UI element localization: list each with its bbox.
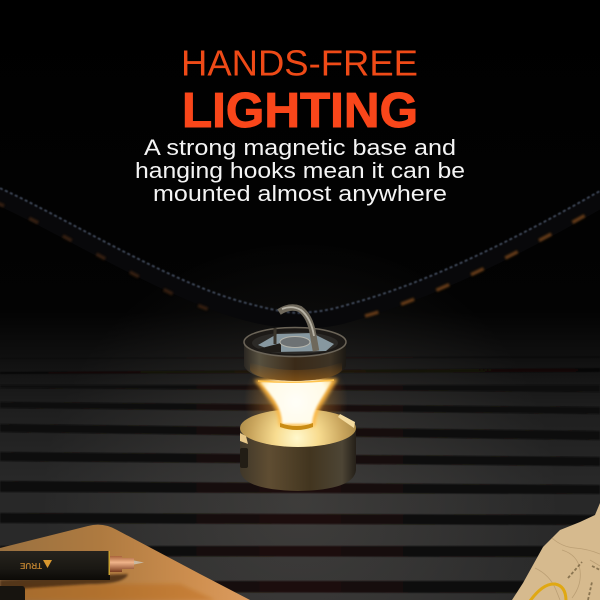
description xyxy=(135,135,465,206)
cap top rim xyxy=(244,328,346,356)
cord left reflection xyxy=(0,202,220,313)
striped surface xyxy=(0,356,600,593)
pen copper tip xyxy=(110,556,134,572)
cord top highlight xyxy=(0,186,600,313)
cap underglow xyxy=(250,362,342,381)
lamp glow xyxy=(244,348,348,452)
bulb rim highlight xyxy=(258,380,334,382)
description: mounted almost anywhere xyxy=(153,181,447,206)
dark clip object xyxy=(0,586,25,600)
surface light xyxy=(0,240,600,600)
base body xyxy=(240,428,356,491)
title: hands-free: HANDS-FREE xyxy=(181,42,418,84)
cap plate xyxy=(258,333,334,352)
title: lighting: LIGHTING xyxy=(182,83,418,138)
description: A strong magnetic base and xyxy=(144,135,456,160)
cord right reflection xyxy=(365,204,600,316)
notebook xyxy=(0,525,250,600)
map paper xyxy=(512,503,600,600)
notebook warm reflection xyxy=(20,584,215,600)
lantern xyxy=(240,307,356,491)
yellow ring xyxy=(530,584,566,600)
cord body xyxy=(0,195,600,320)
cap centre boss xyxy=(280,336,310,348)
cap dark section xyxy=(258,343,281,352)
pen logo xyxy=(43,560,52,568)
bulb halo xyxy=(254,378,338,426)
cap inner disc xyxy=(252,332,338,354)
hanging ring xyxy=(279,308,316,351)
pen body xyxy=(0,551,110,580)
pen xyxy=(0,551,144,580)
base edge highlights xyxy=(338,414,355,428)
cap body xyxy=(244,342,346,381)
pen shadow xyxy=(0,574,128,590)
description: hanging hooks mean it can be xyxy=(135,158,465,183)
bulb collar xyxy=(280,423,313,430)
pen brand text: TRUE xyxy=(19,561,42,570)
cord xyxy=(0,186,600,320)
hanging ring back leg xyxy=(274,328,276,344)
bulb xyxy=(260,380,332,424)
base top xyxy=(240,409,356,447)
